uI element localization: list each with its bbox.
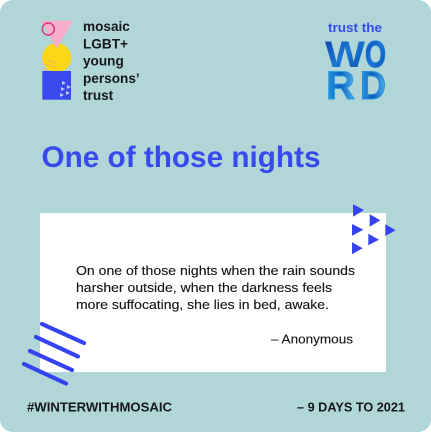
title: One of those nights — [42, 141, 320, 174]
word art: R: R — [326, 64, 355, 108]
hashtag: #WINTERWITHMOSAIC — [27, 400, 173, 414]
logo text — [83, 19, 140, 103]
logo text: young — [83, 54, 124, 68]
word art: O: O — [365, 34, 386, 75]
word art: D: D — [360, 64, 386, 108]
logo text: trust — [83, 88, 114, 103]
trust the label: trust the — [328, 20, 382, 35]
logo: mosaic LGBT+ young persons' trust — [41, 19, 140, 103]
word art: W: W — [325, 34, 365, 75]
icon: blue triangles cluster — [352, 204, 396, 254]
quote text — [76, 264, 355, 312]
icon: yellow circle — [42, 43, 71, 72]
countdown: – 9 DAYS TO 2021 — [297, 400, 405, 414]
logo text: LGBT+ — [83, 36, 128, 52]
icon: pink triangle — [41, 21, 73, 48]
card background — [40, 213, 386, 372]
quote attribution: – Anonymous — [271, 332, 353, 346]
quote text: more suffocating, she lies in bed, awake. — [76, 298, 329, 312]
icon: small triangles — [60, 81, 71, 97]
logo: trust the word — [325, 20, 386, 108]
icon: blue square — [42, 71, 71, 100]
icon: orange stripes — [43, 60, 56, 73]
panel: quote card — [40, 213, 386, 372]
icon: diagonal blue stripes — [24, 324, 84, 384]
logo text: persons’ — [83, 71, 140, 86]
quote text: harsher outside, when the darkness feels — [76, 281, 332, 295]
quote text: On one of those nights when the rain sounds — [76, 264, 355, 278]
icon: magenta ring — [42, 23, 54, 35]
logo text: mosaic — [83, 19, 130, 34]
